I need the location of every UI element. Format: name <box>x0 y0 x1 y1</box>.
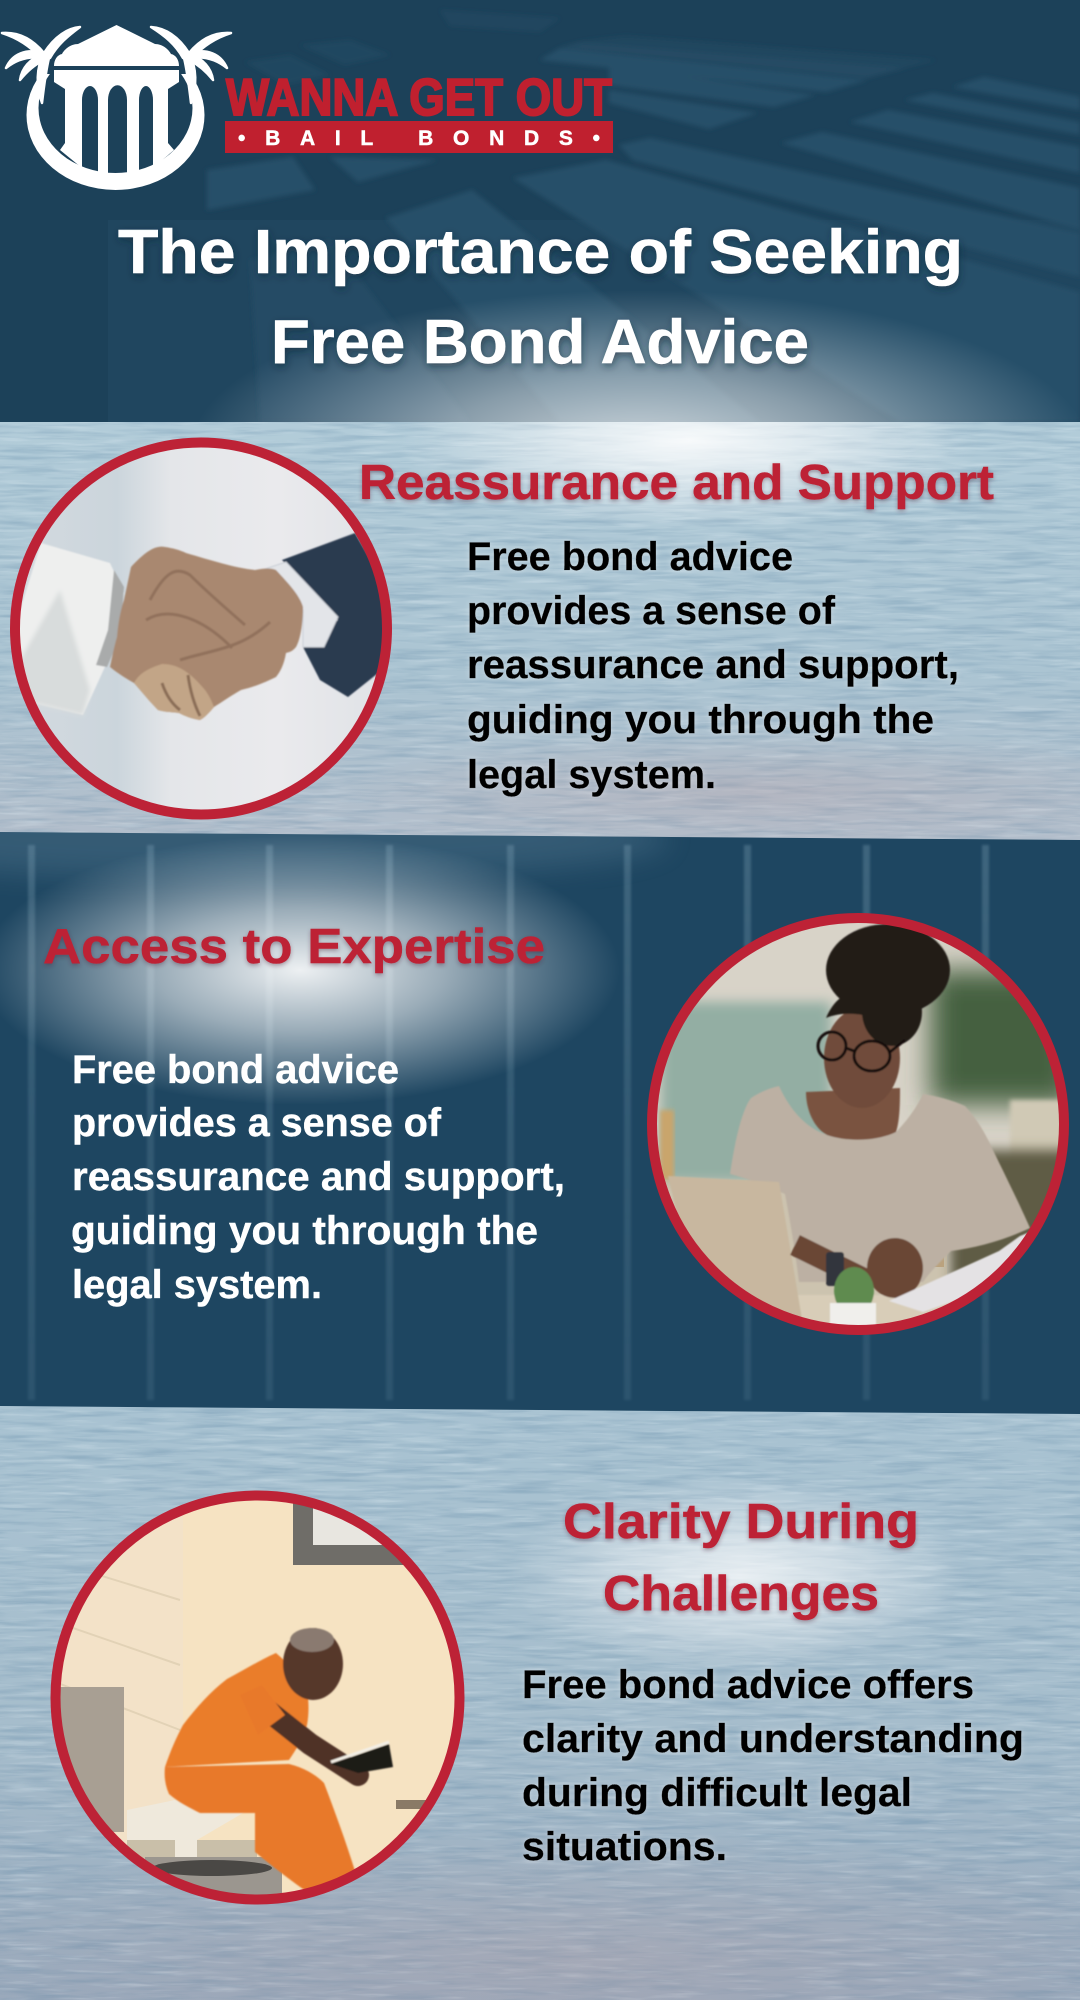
text block: reassurance body: reassurance and support, <box>467 643 959 687</box>
text block: reassurance body: legal system. <box>467 753 716 797</box>
text block: expertise body <box>71 1048 565 1307</box>
text block: clarity body: situations. <box>522 1825 727 1869</box>
text block: clarity body: during difficult legal <box>522 1771 912 1815</box>
photo: woman reviewing documents <box>647 913 1075 1335</box>
heading: clarity during challenges: Challenges <box>603 1567 879 1621</box>
prison bars background <box>207 10 1080 422</box>
text block: expertise body: Free bond advice <box>72 1048 399 1092</box>
title: Free Bond Advice <box>271 308 809 377</box>
text block: expertise body: legal system. <box>72 1263 322 1307</box>
panel: clarity during challenges <box>50 1490 1024 1905</box>
text block: expertise body: provides a sense of <box>72 1101 442 1145</box>
panel: reassurance and support <box>10 438 994 820</box>
text block: reassurance body: guiding you through the <box>467 698 934 742</box>
panel: access to expertise <box>0 800 1080 1425</box>
text block: reassurance body: provides a sense of <box>467 589 836 633</box>
logo wordmark: WANNA GET OUT <box>226 69 612 127</box>
text block: clarity body <box>522 1663 1024 1869</box>
heading: clarity during challenges: Clarity During <box>563 1495 919 1549</box>
title: The Importance of Seeking <box>118 218 963 287</box>
logo: Wanna Get Out Bail Bonds <box>2 25 613 190</box>
text block: reassurance body: Free bond advice <box>467 535 793 579</box>
text block: reassurance body <box>467 535 959 797</box>
text block: expertise body: reassurance and support, <box>72 1155 565 1199</box>
title <box>118 218 963 377</box>
logo ribbon <box>225 121 613 153</box>
photo: man reading in cell <box>50 1490 465 1905</box>
photo: handshake <box>10 438 392 820</box>
text block: clarity body: clarity and understanding <box>522 1717 1024 1761</box>
heading: access to expertise: Access to Expertise <box>43 920 545 974</box>
icon: courthouse shield with palms <box>2 25 231 190</box>
heading: reassurance and support: Reassurance and Support <box>359 456 994 510</box>
logo ribbon: •BAIL BONDS• <box>238 127 600 150</box>
text block: clarity body: Free bond advice offers <box>522 1663 974 1707</box>
text block: expertise body: guiding you through the <box>71 1209 538 1253</box>
section background with vertical bars <box>0 800 1080 1425</box>
header panel <box>0 0 1080 422</box>
heading: clarity during challenges <box>563 1495 919 1621</box>
